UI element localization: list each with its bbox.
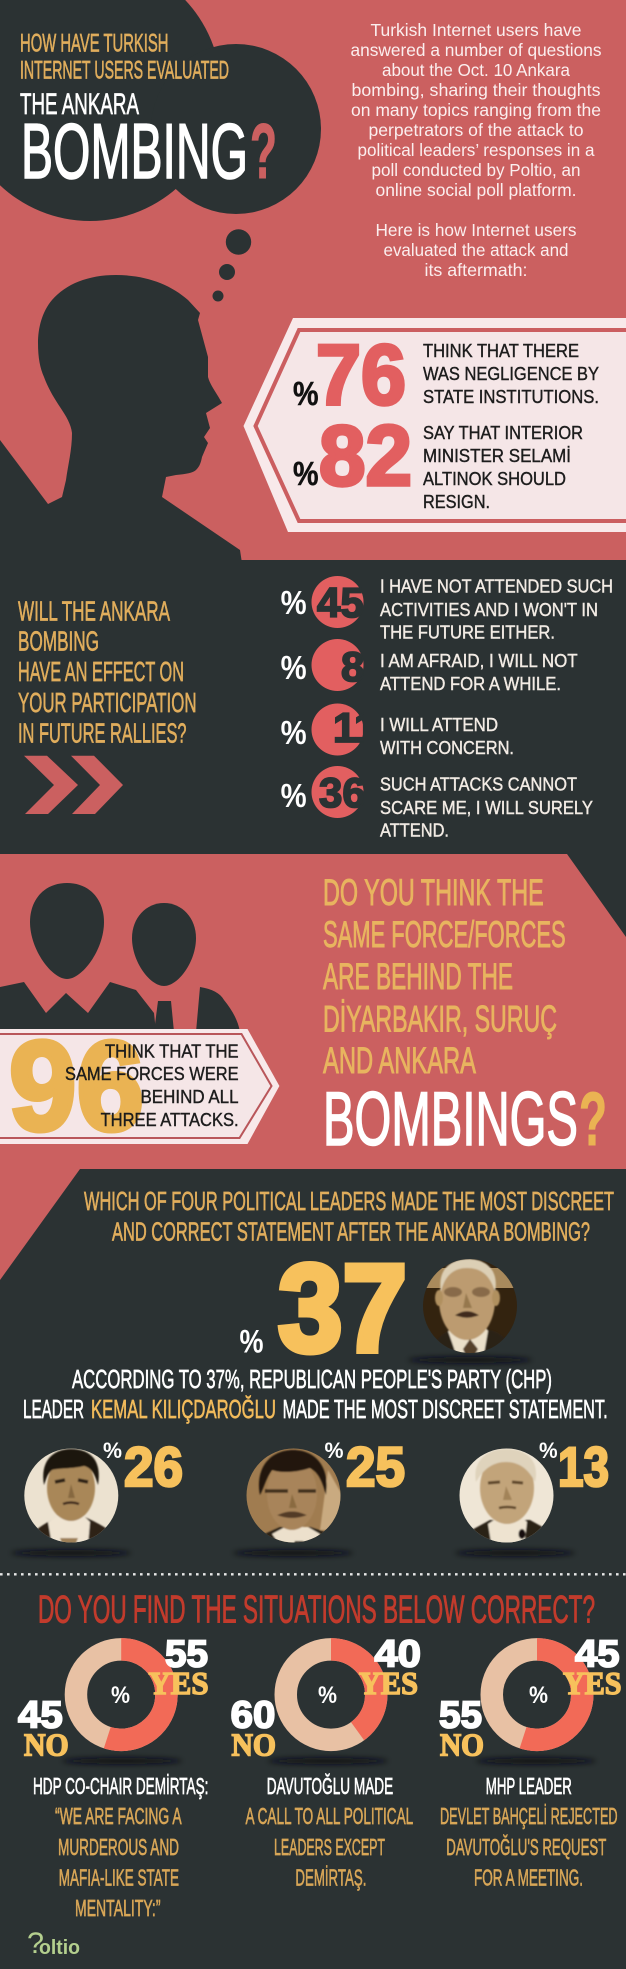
text block: Demirtaş statement: MURDEROUS AND xyxy=(58,1834,179,1860)
portrait: Demirtaş xyxy=(24,1448,118,1542)
chart: Demirtaş poll donut: YES xyxy=(148,1665,208,1701)
answer labels xyxy=(380,576,613,841)
stat: 76 percent: STATE INSTITUTIONS. xyxy=(423,386,599,407)
chart: Bahçeli poll donut: NO xyxy=(440,1727,484,1763)
text block: Davutoğlu statement: LEADERS EXCEPT xyxy=(274,1834,385,1860)
panel: negligence and resignation stats xyxy=(244,318,626,532)
statement about Kılıçdaroğlu: LEADER xyxy=(23,1394,84,1424)
answer numbers: 45 xyxy=(317,579,364,626)
heading: rally participation question: HAVE AN EFFECT ON xyxy=(18,656,184,687)
intro text: political leaders’ responses in a xyxy=(358,140,595,160)
portrait: Kılıçdaroğlu xyxy=(423,1259,517,1353)
text block: Demirtaş statement: MENTALITY:” xyxy=(75,1895,160,1921)
intro text: Here is how Internet users xyxy=(376,220,577,240)
portrait: Davutoğlu xyxy=(246,1448,340,1542)
answer labels: THE FUTURE EITHER. xyxy=(380,622,555,643)
answer numbers: 36 xyxy=(319,769,366,816)
stat: 82 percent: 82 xyxy=(319,409,412,504)
leader: Davutoğlu 25 percent: 25 xyxy=(346,1435,405,1498)
icon: two people silhouettes xyxy=(0,883,240,1032)
text block: Demirtaş statement: HDP CO-CHAIR DEMİRTAŞ: xyxy=(33,1773,208,1799)
stat: 82 percent: % xyxy=(293,455,318,492)
chart: rally answers xyxy=(281,576,613,841)
intro text: about the Oct. 10 Ankara xyxy=(382,60,570,80)
stat: 76 percent: 76 xyxy=(316,328,406,423)
intro text: online social poll platform. xyxy=(376,180,576,200)
answer labels: SUCH ATTACKS CANNOT xyxy=(380,774,577,795)
leader: Bahçeli 13 percent: % xyxy=(539,1438,558,1463)
answer labels: ACTIVITIES AND I WON'T IN xyxy=(380,599,598,620)
answer labels: I WILL ATTEND xyxy=(380,714,498,735)
statement about Kılıçdaroğlu xyxy=(23,1364,608,1424)
stat: 82 percent: ALTINOK SHOULD xyxy=(423,468,566,489)
leader: Bahçeli 13 percent xyxy=(455,1435,609,1556)
chart: Davutoğlu poll donut: % xyxy=(318,1682,337,1709)
callout text: BEHIND ALL xyxy=(140,1086,238,1107)
stat: 82 percent: MINISTER SELAMİ xyxy=(423,445,571,466)
heading: same forces question: ? xyxy=(579,1077,607,1162)
callout text: SAME FORCES WERE xyxy=(65,1063,239,1084)
heading: same forces question: AND ANKARA xyxy=(323,1040,476,1081)
percent signs: % xyxy=(281,714,307,751)
callout text xyxy=(65,1040,239,1130)
stat: 76 percent: THINK THAT THERE xyxy=(423,340,579,361)
statement about Kılıçdaroğlu: KEMAL KILIÇDAROĞLU xyxy=(91,1394,276,1424)
panel: 96 percent callout: 96 xyxy=(9,1015,144,1157)
logo: Poltio: oltio xyxy=(39,1937,80,1959)
portrait: Bahçeli xyxy=(460,1448,554,1542)
chart: Demirtaş poll donut: 55 xyxy=(165,1634,208,1676)
leader: Davutoğlu 25 percent xyxy=(233,1435,405,1556)
title: HOW HAVE TURKISH xyxy=(20,31,168,58)
intro text: Turkish Internet users have xyxy=(370,20,582,40)
heading: rally participation question: YOUR PARTICIPATION xyxy=(18,687,196,718)
stat: 76 percent: WAS NEGLIGENCE BY xyxy=(423,363,599,384)
percent signs: % xyxy=(281,649,307,686)
chart: Davutoğlu poll donut: 40 xyxy=(374,1634,421,1676)
chart: Demirtaş poll donut: % xyxy=(111,1682,130,1709)
chart: Bahçeli poll donut: % xyxy=(529,1682,548,1709)
intro text: bombing, sharing their thoughts xyxy=(352,80,601,100)
answer labels: I AM AFRAID, I WILL NOT xyxy=(380,650,578,671)
text block: Bahçeli statement xyxy=(440,1773,618,1891)
thought cloud with title xyxy=(0,0,321,221)
chart: Demirtaş poll donut: NO xyxy=(24,1727,69,1763)
stat: 82 percent: RESIGN. xyxy=(423,491,490,512)
title: ? xyxy=(250,107,277,195)
logo: Poltio xyxy=(27,1927,80,1960)
answer numbers xyxy=(316,587,364,808)
text block: Demirtaş statement: MAFIA-LIKE STATE xyxy=(59,1865,179,1891)
intro text: perpetrators of the attack to xyxy=(368,120,584,140)
leader: Demirtaş 26 percent xyxy=(11,1435,183,1556)
intro text: answered a number of questions xyxy=(350,40,602,60)
text block: Davutoğlu statement: A CALL TO ALL POLITICAL xyxy=(246,1803,413,1829)
percent signs xyxy=(281,584,307,814)
chart: Davutoğlu poll donut: 60 xyxy=(231,1694,275,1736)
answer labels: ATTEND FOR A WHILE. xyxy=(380,673,561,694)
text block: Demirtaş statement xyxy=(33,1773,208,1921)
text block: Davutoğlu statement: DEMİRTAŞ. xyxy=(295,1865,366,1891)
answer labels: WITH CONCERN. xyxy=(380,737,514,758)
text block: Davutoğlu statement: DAVUTOĞLU MADE xyxy=(267,1773,393,1799)
icon: thought bubbles xyxy=(212,229,251,302)
intro text xyxy=(350,20,602,280)
chart: Davutoğlu poll donut: NO xyxy=(232,1727,276,1763)
leader: Bahçeli 13 percent: 13 xyxy=(558,1435,609,1498)
text block: Davutoğlu statement xyxy=(246,1773,413,1891)
heading: same forces question xyxy=(323,872,607,1162)
heading: four political leaders question xyxy=(84,1188,614,1247)
stat: 37 percent: % xyxy=(240,1324,264,1360)
intro text: evaluated the attack and xyxy=(384,240,568,260)
callout text: THREE ATTACKS. xyxy=(101,1109,239,1130)
title xyxy=(20,31,277,195)
stat: 37 percent: 37 xyxy=(278,1240,407,1378)
answer numbers: 11 xyxy=(333,704,377,751)
heading: rally participation question: IN FUTURE RALLIES? xyxy=(18,718,186,749)
heading: rally participation question: BOMBING xyxy=(18,626,99,657)
panel: 96 percent callout xyxy=(0,1015,279,1157)
leader: Demirtaş 26 percent: 26 xyxy=(124,1435,183,1498)
chart: Bahçeli poll donut xyxy=(439,1634,622,1764)
intro text: poll conducted by Poltio, an xyxy=(372,160,580,180)
callout text: THINK THAT THE xyxy=(105,1040,239,1061)
icon: double chevron arrow xyxy=(24,756,123,814)
title: BOMBING xyxy=(21,107,248,195)
logo: Poltio: ? xyxy=(27,1927,44,1960)
answer labels: SCARE ME, I WILL SURELY xyxy=(380,797,593,818)
shadow under portrait xyxy=(408,1357,532,1363)
text block: Demirtaş statement: “WE ARE FACING A xyxy=(55,1803,182,1829)
title: INTERNET USERS EVALUATED xyxy=(20,57,229,84)
percent signs: % xyxy=(281,777,307,814)
heading: rally participation question xyxy=(18,596,196,749)
intro text: its aftermath: xyxy=(424,260,528,280)
chart: Davutoğlu poll donut xyxy=(231,1634,421,1764)
stat: 82 percent: SAY THAT INTERIOR xyxy=(423,422,583,443)
chart: Davutoğlu poll donut: YES xyxy=(359,1665,418,1701)
stat: 82 percent xyxy=(293,409,583,512)
panel: middle red background xyxy=(0,854,626,1280)
stat: 76 percent: % xyxy=(293,375,318,412)
icon: head silhouette xyxy=(0,275,242,560)
leader: Demirtaş 26 percent: % xyxy=(103,1438,122,1463)
chart: Bahçeli poll donut: YES xyxy=(563,1665,622,1701)
chart: Bahçeli poll donut: 45 xyxy=(575,1634,620,1676)
percent signs: % xyxy=(281,584,307,621)
chart: Bahçeli poll donut: 55 xyxy=(439,1694,482,1736)
answer labels: ATTEND. xyxy=(380,820,449,841)
intro text: on many topics ranging from the xyxy=(351,100,601,120)
leader: Davutoğlu 25 percent: % xyxy=(324,1438,344,1463)
stat: 76 percent xyxy=(293,328,599,423)
panel: top red background xyxy=(0,0,626,560)
chart: Demirtaş poll donut xyxy=(18,1634,208,1764)
answer numbers: 8 xyxy=(341,643,364,690)
chart: Demirtaş poll donut: 45 xyxy=(18,1694,63,1736)
heading: rally participation question: WILL THE ANKARA xyxy=(18,596,170,627)
heading: same forces question: ARE BEHIND THE xyxy=(323,956,513,997)
title: THE ANKARA xyxy=(20,88,139,121)
